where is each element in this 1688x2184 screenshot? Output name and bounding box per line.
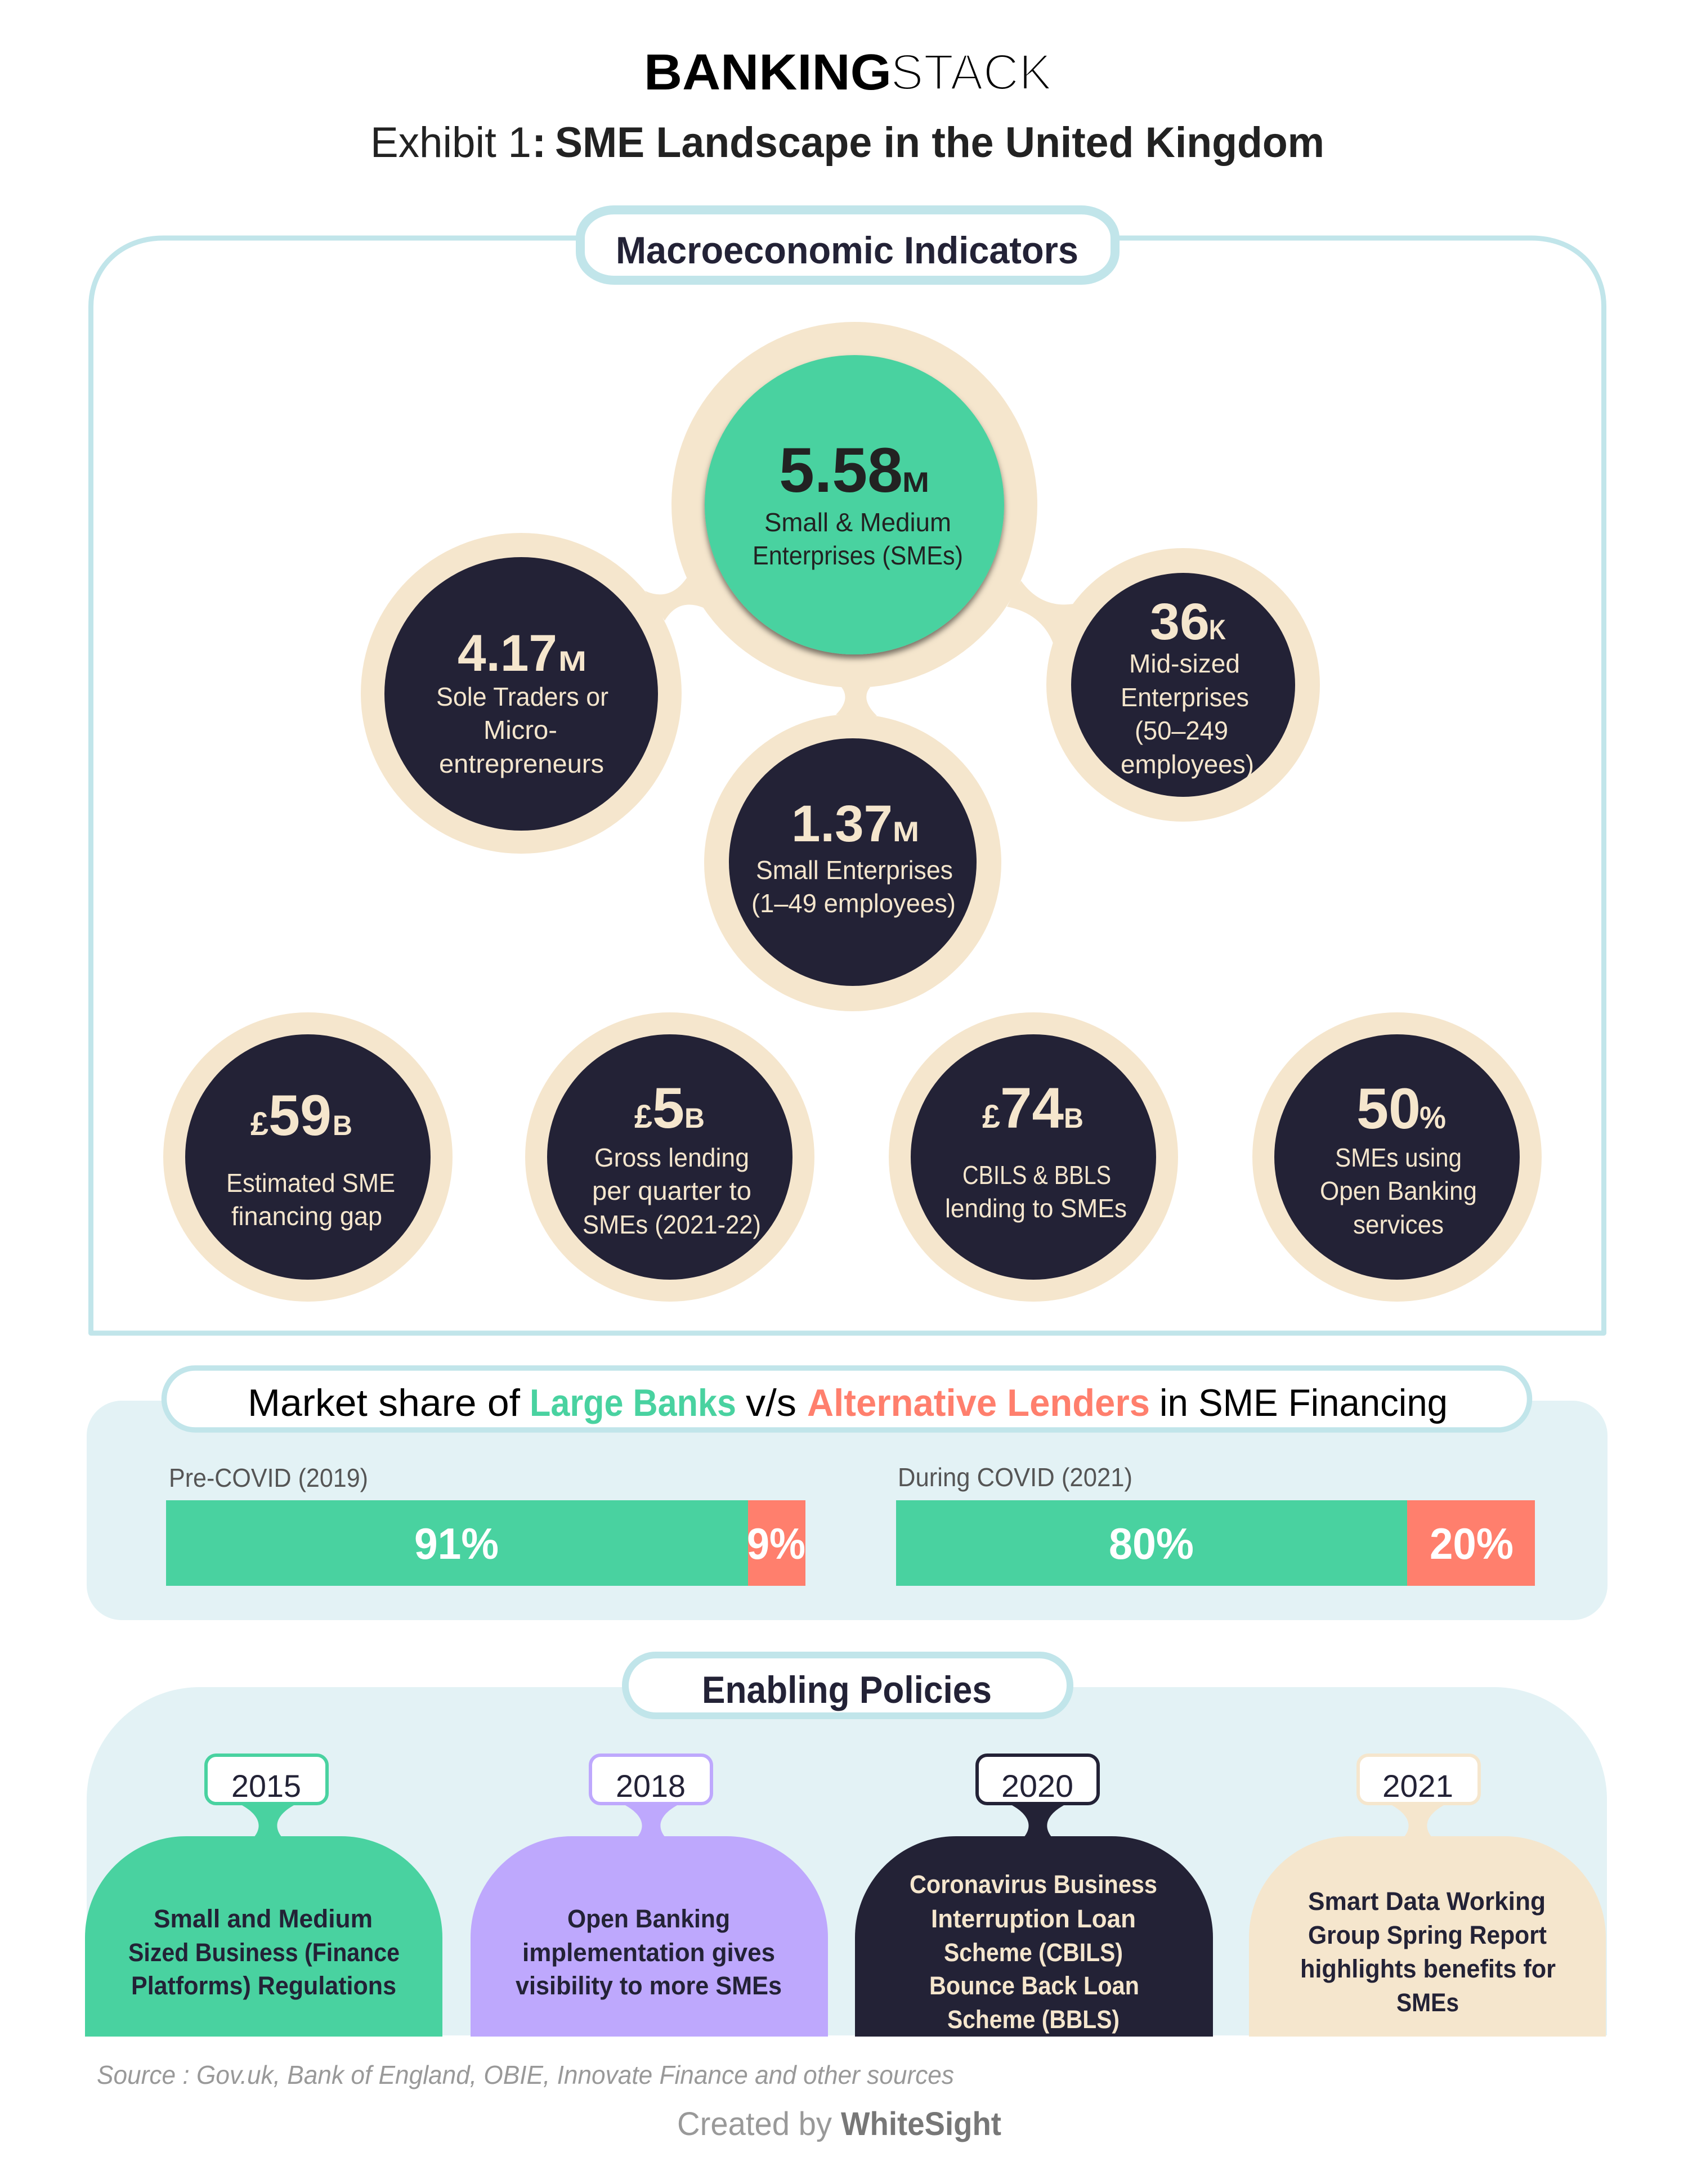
policy card: 2021: 2021: [1382, 1768, 1453, 1804]
heading pill: market share: Large Banks: [530, 1382, 736, 1424]
circle: 36K mid-sized: employees): [1121, 750, 1254, 779]
bar chart: pre-COVID 2019: 91%: [414, 1519, 499, 1568]
circle: 4.17M sole traders: entrepreneurs: [439, 749, 604, 778]
policy card: 2018: visibility to more SMEs: [516, 1971, 782, 2000]
policy card: 2020: Scheme (CBILS): [944, 1938, 1123, 1967]
logo: BankingStack: BANKING: [644, 44, 892, 101]
policy card: 2021: [1249, 1755, 1606, 2037]
circle: £74B CBILS and BBLS: B: [1064, 1102, 1083, 1134]
circle: £5B gross lending: [525, 1012, 814, 1302]
circle: 1.37M small enterprises: M: [893, 816, 919, 847]
policy card: 2015: 2015: [231, 1768, 301, 1804]
bar chart: pre-COVID 2019: Pre-COVID (2019): [169, 1463, 368, 1492]
circle: 1.37M small enterprises: [704, 714, 1001, 1011]
heading pill: Enabling Policies: Enabling Policies: [702, 1669, 992, 1711]
circle: £74B CBILS and BBLS: £: [982, 1098, 1000, 1135]
circle: 4.17M sole traders: [361, 533, 682, 854]
heading pill: market share: Alternative Lenders: [807, 1382, 1150, 1424]
policy card: 2020: Bounce Back Loan: [929, 1971, 1139, 2000]
market share background: [87, 1401, 1608, 1620]
policy card: 2020: Coronavirus Business: [910, 1870, 1157, 1899]
logo: BankingStack: STACK: [890, 44, 1052, 101]
circle: £5B gross lending: SMEs (2021-22): [583, 1210, 761, 1239]
circle: 1.37M small enterprises: (1–49 employees): [751, 889, 956, 918]
credit: [677, 2106, 1001, 2142]
circle: 5.58M SMEs: 5.58: [779, 435, 903, 505]
circle: 5.58M SMEs: [671, 322, 1037, 688]
circle: 50% open banking: SMEs using: [1335, 1143, 1462, 1172]
circle: 4.17M sole traders: Sole Traders or: [436, 682, 608, 711]
circle: 50% open banking: [1252, 1012, 1542, 1302]
panel frame: [91, 238, 1604, 1333]
policy card: 2021: Smart Data Working: [1308, 1887, 1546, 1916]
circle: £5B gross lending: 5: [652, 1076, 684, 1140]
panel: enabling policies: [85, 1655, 1607, 2037]
circle: 5.58M SMEs: Enterprises (SMEs): [753, 541, 963, 570]
circle: 50% open banking: services: [1353, 1210, 1444, 1239]
policy card: 2021: SMEs: [1396, 1988, 1459, 2017]
bar chart: during COVID 2021: [896, 1463, 1535, 1586]
policy card: 2015: Sized Business (Finance: [128, 1938, 400, 1967]
circle: 5.58M SMEs: Small & Medium: [764, 508, 951, 537]
circle: £74B CBILS and BBLS: CBILS & BBLS: [962, 1160, 1111, 1190]
policy card: 2018: [471, 1755, 828, 2037]
circle: £59B financing gap: [163, 1012, 453, 1302]
circle: £74B CBILS and BBLS: 74: [1000, 1076, 1064, 1140]
policy card: 2018: 2018: [616, 1768, 686, 1804]
circle: £74B CBILS and BBLS: [889, 1012, 1178, 1302]
credit: WhiteSight: [841, 2106, 1001, 2142]
circle: £59B financing gap: Estimated SME: [226, 1168, 395, 1198]
circle: 36K mid-sized: K: [1209, 614, 1226, 645]
policy card: 2020: Scheme (BBLS): [947, 2005, 1120, 2034]
circle: £74B CBILS and BBLS: lending to SMEs: [945, 1194, 1127, 1223]
circle: 50% open banking: %: [1420, 1100, 1446, 1135]
circle: 50% open banking: Open Banking: [1320, 1176, 1477, 1205]
circle: £5B gross lending: per quarter to: [592, 1176, 751, 1205]
policy card: 2021: Group Spring Report: [1308, 1921, 1547, 1949]
circle: 36K mid-sized: (50–249: [1135, 716, 1228, 745]
circle: £5B gross lending: Gross lending: [594, 1143, 749, 1172]
heading pill: Enabling Policies: [625, 1655, 1070, 1716]
connectors between circles: [645, 578, 1074, 716]
circle: £59B financing gap: B: [333, 1110, 352, 1141]
circle: 36K mid-sized: Mid-sized: [1129, 649, 1240, 678]
title: :: [532, 119, 546, 167]
panel: macroeconomic indicators: [91, 210, 1604, 1333]
title: SME Landscape in the United Kingdom: [555, 119, 1324, 167]
panel: market share: [87, 1368, 1608, 1620]
heading pill: market share: in SME Financing: [1159, 1382, 1448, 1424]
policy card: 2018: implementation gives: [522, 1938, 775, 1967]
circle: £5B gross lending: £: [634, 1098, 652, 1135]
heading pill: Macroeconomic Indicators: Macroeconomic Indicators: [616, 229, 1078, 272]
heading pill: market share: Market share of: [248, 1382, 520, 1424]
bar chart: during COVID 2021: During COVID (2021): [898, 1463, 1132, 1492]
bar chart: during COVID 2021: 20%: [1430, 1519, 1514, 1568]
circle: £59B financing gap: financing gap: [231, 1201, 382, 1231]
circle: 4.17M sole traders: 4.17: [458, 625, 557, 682]
circle: £59B financing gap: 59: [268, 1083, 332, 1147]
logo: BankingStack: [644, 44, 1052, 101]
circle: 4.17M sole traders: M: [558, 645, 586, 677]
heading pill: Macroeconomic Indicators: [580, 210, 1115, 280]
circle: £59B financing gap: £: [250, 1106, 268, 1142]
policy card: 2015: [85, 1755, 442, 2037]
policy card: 2020: [855, 1755, 1213, 2037]
policy card: 2021: highlights benefits for: [1300, 1954, 1556, 1983]
credit: Created by: [677, 2106, 832, 2142]
bar chart: during COVID 2021: 80%: [1109, 1519, 1194, 1568]
heading pill: market share: [164, 1368, 1530, 1430]
bar chart: pre-COVID 2019: [166, 1463, 805, 1586]
bar chart: pre-COVID 2019: 9%: [747, 1519, 805, 1568]
circle: 36K mid-sized: 36: [1150, 593, 1210, 651]
policy card: 2020: 2020: [1001, 1768, 1073, 1804]
circle: 1.37M small enterprises: Small Enterprises: [756, 855, 953, 885]
circle: 36K mid-sized: Enterprises: [1121, 683, 1249, 712]
circle: £5B gross lending: B: [684, 1102, 705, 1134]
enabling policies background: [87, 1687, 1607, 2035]
policy card: 2020: Interruption Loan: [931, 1904, 1136, 1933]
circle: 4.17M sole traders: Micro-: [483, 715, 557, 745]
circle: 1.37M small enterprises: 1.37: [791, 795, 893, 853]
circle: 50% open banking: 50: [1356, 1077, 1421, 1141]
title: Exhibit 1: [370, 119, 531, 167]
policy card: 2015: Platforms) Regulations: [131, 1971, 396, 2000]
policy card: 2018: Open Banking: [567, 1904, 730, 1933]
circle: 5.58M SMEs: M: [902, 467, 929, 498]
circle: 36K mid-sized: [1046, 548, 1320, 822]
heading pill: market share: v/s: [746, 1382, 796, 1424]
policy card: 2015: Small and Medium: [154, 1904, 373, 1933]
source note: Source : Gov.uk, Bank of England, OBIE, Innovate Finance and other sources: [97, 2060, 954, 2089]
